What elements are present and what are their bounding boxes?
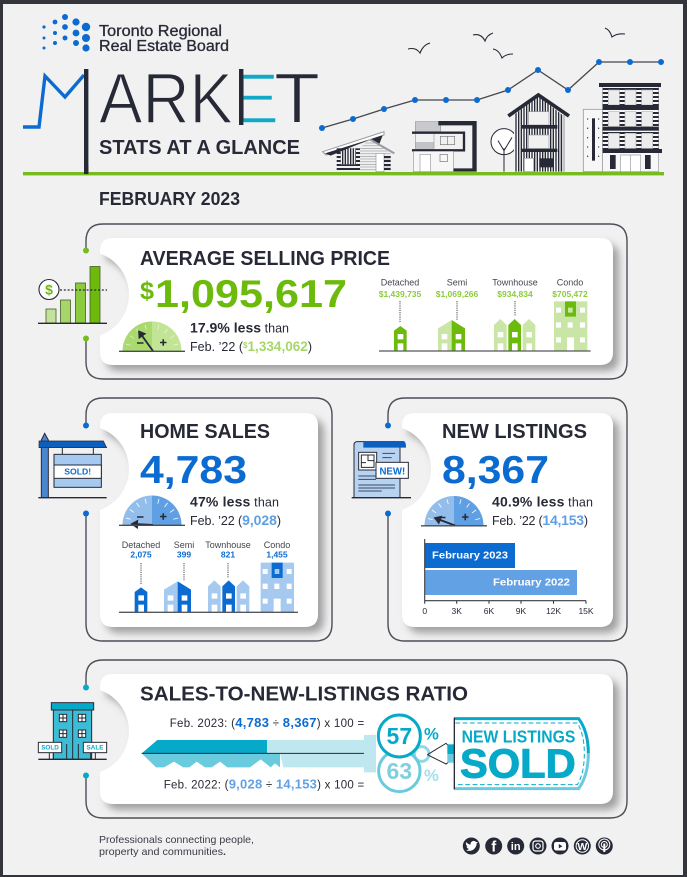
icon: bar chart with dollar	[38, 266, 107, 323]
key graphic comparing ratios: 63	[387, 758, 412, 784]
subtitle: STATS AT A GLANCE	[99, 137, 300, 159]
tag: new listings sold: SOLD	[460, 740, 576, 786]
bar chart: listings 2023 vs 2022: 0	[422, 606, 427, 616]
key graphic comparing ratios: %	[424, 766, 439, 785]
chart: price by home type: $705,472	[552, 289, 588, 299]
key graphic comparing ratios: 57	[387, 723, 412, 749]
social media icons	[463, 838, 613, 856]
tagline: property and communities .	[99, 846, 226, 858]
big number: 4,783	[140, 449, 247, 492]
heading: NEW LISTINGS	[442, 421, 587, 443]
bar chart: listings 2023 vs 2022: 3K	[451, 606, 462, 616]
logo: Toronto Regional Real Estate Board: Toronto Regional	[99, 23, 222, 40]
title: MARKET: ARK	[99, 60, 233, 139]
tagline	[99, 834, 254, 858]
icon: new listing document	[352, 441, 411, 498]
chart: sales by home type: 399	[177, 550, 191, 560]
gauge	[119, 322, 185, 351]
formula 2022: Feb. 2022: (9,028 ÷ 14,153) x 100 =	[164, 777, 364, 792]
chart: sales by home type: 2,075	[130, 550, 152, 560]
big number: $	[140, 277, 154, 305]
heading: SALES-TO-NEW-LISTINGS RATIO	[140, 684, 468, 706]
comparison text: Feb. ’22 (	[190, 340, 243, 354]
logo: Toronto Regional Real Estate Board	[42, 14, 229, 55]
comparison text: 47% less than	[190, 494, 279, 510]
chart: sales by home type: Semi	[174, 540, 194, 550]
bar chart: listings 2023 vs 2022: 12K	[546, 606, 561, 616]
comparison text: 40.9% less than	[492, 494, 593, 510]
chart: sales by home type: 821	[221, 550, 235, 560]
chart: price by home type: Townhouse	[492, 278, 538, 288]
comparison text: )	[308, 340, 312, 354]
icon: building with sold and sale signs: SOLD	[41, 745, 59, 752]
social media icons: in	[511, 841, 521, 853]
comparison text: Feb. ’22 (9,028)	[190, 512, 281, 528]
social media icons: W	[577, 841, 587, 853]
chart: sales by home type: Detached	[122, 540, 160, 550]
chart: price by home type: $934,834	[497, 289, 533, 299]
chart: price by home type: Semi	[447, 278, 467, 288]
chart: price by home type: Detached	[381, 278, 419, 288]
icon: building with sold and sale signs: SALE	[87, 745, 103, 752]
chart: price by home type: $1,439,735	[379, 289, 422, 299]
title: MARKET	[23, 60, 320, 174]
comparison text: $	[243, 341, 248, 350]
bar chart: listings 2023 vs 2022: February 2022	[493, 577, 570, 589]
comparison text: 1,334,062	[248, 339, 308, 354]
icon: new listing document: NEW!	[379, 466, 405, 477]
key graphic comparing ratios: %	[424, 724, 439, 743]
big number: 1,095,617	[155, 273, 347, 316]
bar chart: listings 2023 vs 2022	[422, 539, 594, 616]
tag: new listings sold	[427, 718, 589, 790]
bar chart: listings 2023 vs 2022: 15K	[578, 606, 594, 616]
icon: sold sign: SOLD!	[64, 467, 91, 477]
panel: new listings	[352, 398, 627, 641]
icon: bar chart with dollar: $	[45, 282, 53, 298]
title: MARKET: T	[274, 60, 320, 139]
comparison text	[190, 320, 312, 354]
title: MARKET: E	[232, 60, 279, 139]
chart: sales by home type	[119, 540, 298, 612]
chart: sales by home type: Townhouse	[205, 540, 251, 550]
panel: average selling price	[38, 224, 627, 379]
skyline illustration with line chart	[23, 28, 664, 175]
icon: building with sold and sale signs	[38, 703, 107, 759]
bar chart: listings 2023 vs 2022: 9K	[516, 606, 527, 616]
bar chart: listings 2023 vs 2022: February 2023	[432, 550, 508, 562]
date heading: FEBRUARY 2023	[99, 189, 240, 209]
tag: new listings sold: NEW LISTINGS	[462, 726, 575, 746]
gauge	[119, 496, 185, 525]
formula 2023: Feb. 2023: (4,783 ÷ 8,367) x 100 =	[170, 715, 364, 730]
heading: AVERAGE SELLING PRICE	[140, 248, 390, 270]
chart: price by home type	[379, 278, 591, 351]
chart: sales by home type: Condo	[264, 540, 290, 550]
comparison text: 17.9% less than	[190, 320, 289, 336]
comparison text	[190, 494, 281, 528]
heading: HOME SALES	[140, 421, 270, 443]
gauge	[421, 496, 487, 526]
social media icons: f	[491, 838, 497, 856]
panel: home sales	[38, 398, 332, 641]
tagline: Professionals connecting people,	[99, 834, 254, 846]
chart: price by home type: $1,069,266	[436, 289, 479, 299]
key graphic comparing ratios	[142, 715, 439, 792]
icon: sold sign	[38, 433, 107, 498]
comparison text: Feb. ’22 (14,153)	[492, 512, 588, 528]
chart: price by home type: Condo	[557, 278, 583, 288]
panel: sales-to-new-listings ratio	[38, 660, 627, 818]
bar chart: listings 2023 vs 2022: 6K	[484, 606, 495, 616]
logo: Toronto Regional Real Estate Board: Real Estate Board	[99, 38, 229, 55]
big number: 8,367	[442, 449, 549, 492]
comparison text	[492, 494, 593, 528]
chart: sales by home type: 1,455	[266, 550, 288, 560]
